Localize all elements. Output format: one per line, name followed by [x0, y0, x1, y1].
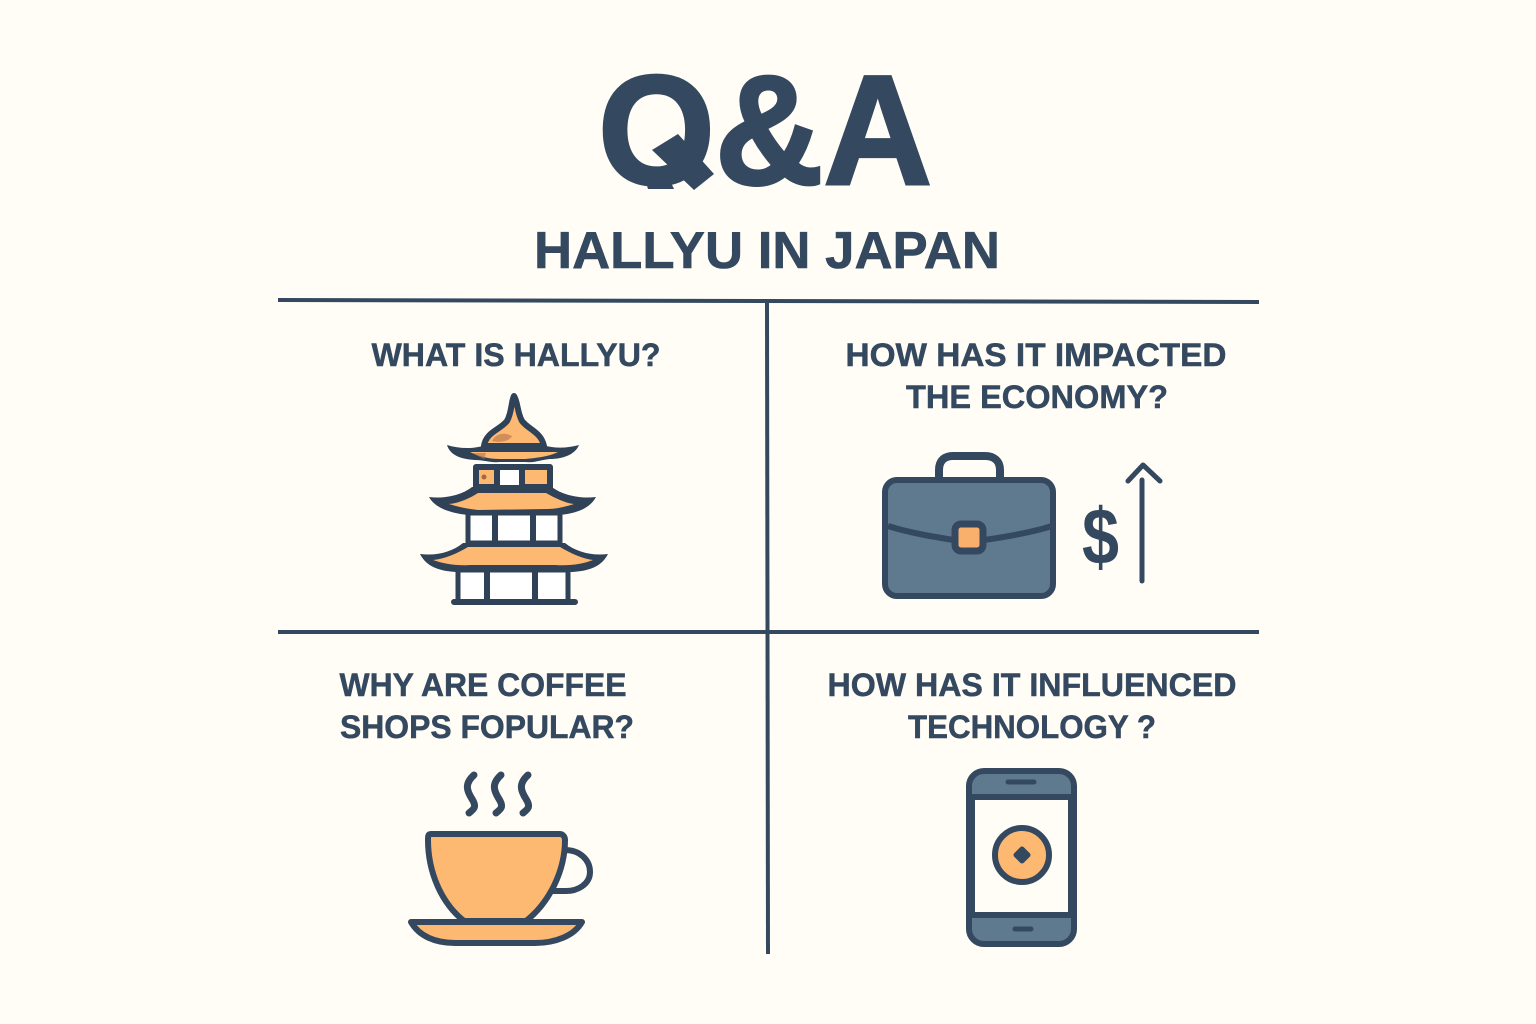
title: Q&A: [598, 44, 932, 218]
panel: technology: [828, 667, 1236, 944]
icon: coffee cup: [411, 775, 590, 943]
icon: dollar and up arrow: [1082, 465, 1160, 581]
icon: smartphone: [969, 771, 1074, 944]
bottom roof: [420, 543, 608, 572]
grid lines: [278, 300, 1259, 954]
question: economy: THE ECONOMY?: [906, 379, 1168, 415]
weathering marks: [472, 434, 512, 459]
title: [602, 74, 930, 190]
question: coffee shops: SHOPS FOPULAR?: [340, 709, 634, 745]
question: economy: HOW HAS IT IMPACTED: [846, 337, 1226, 373]
icon: dollar and up arrow: $: [1082, 492, 1119, 581]
pagoda walls: [454, 467, 575, 602]
question: technology: TECHNOLOGY ?: [908, 709, 1156, 745]
top roof: [484, 396, 544, 446]
steam: [467, 775, 529, 813]
panel: economy: [846, 337, 1226, 596]
middle roof: [429, 487, 596, 515]
question: technology: HOW HAS IT INFLUENCED: [828, 667, 1236, 703]
panel: coffee shops: [340, 667, 634, 943]
question: coffee shops: WHY ARE COFFEE: [340, 667, 626, 703]
question: economy: [846, 337, 1226, 415]
icon: pagoda: [420, 396, 608, 602]
icon: briefcase: [885, 456, 1053, 596]
question: coffee shops: [340, 667, 634, 745]
panel: what is hallyu: [372, 337, 660, 602]
question: what is hallyu: WHAT IS HALLYU?: [372, 337, 660, 373]
question: technology: [828, 667, 1236, 745]
subtitle: HALLYU IN JAPAN: [534, 222, 1000, 280]
